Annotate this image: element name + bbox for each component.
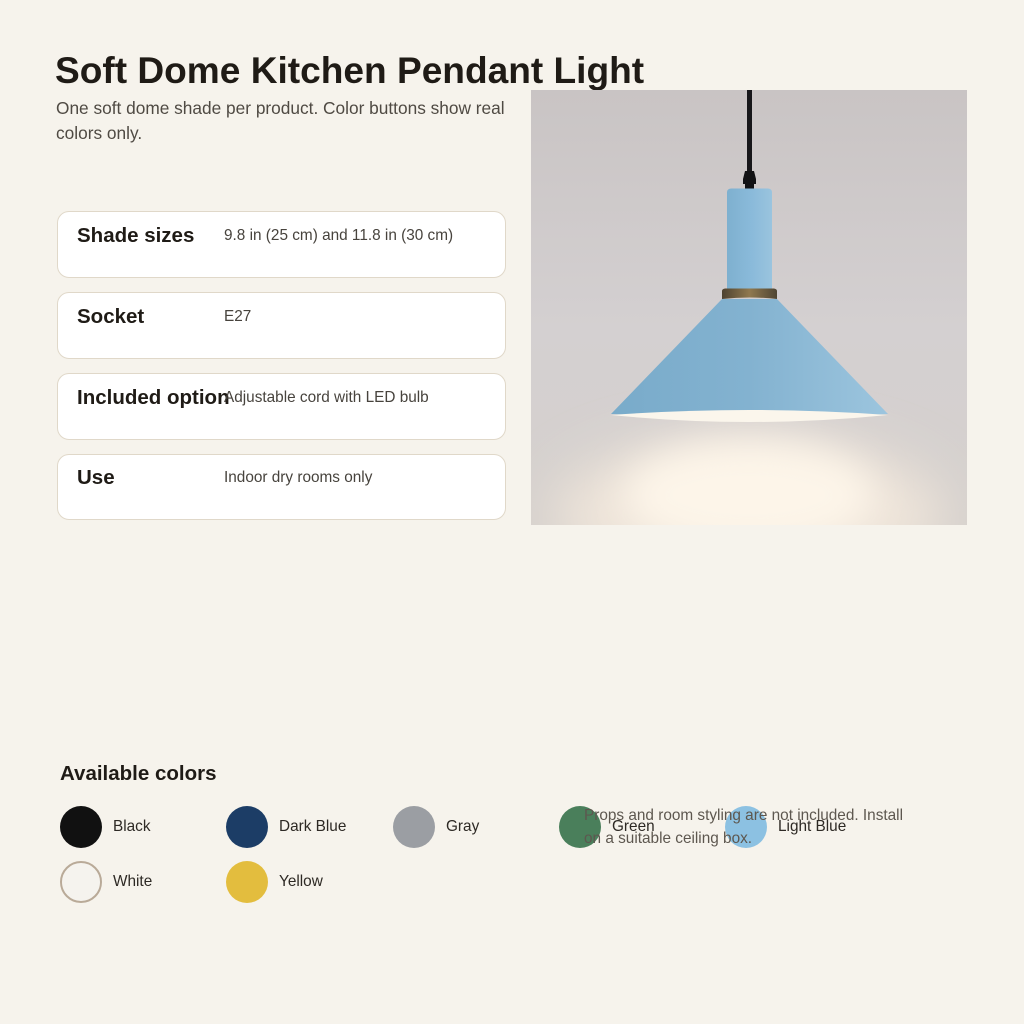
colors heading: Available colors [60,762,216,785]
spec card: shade sizes [56,211,506,278]
spec card: use: Indoor dry rooms only [224,469,372,486]
spec card: socket [56,292,506,359]
swatch: white: White [113,872,152,890]
shade inner rim [611,410,888,422]
swatch: dark blue [226,806,346,848]
spec card: shade sizes: 9.8 in (25 cm) and 11.8 in (30 cm) [224,227,453,244]
footnote: Props and room styling are not included. Install on a suitable ceiling box. [584,807,903,847]
spec card: shade sizes: Shade sizes [77,224,194,247]
product photo: blue pendant lamp [531,90,967,525]
swatch: green [559,806,655,848]
swatch: gray: Gray [446,818,479,834]
spec card: socket: E27 [224,308,251,325]
swatch: black [60,806,151,848]
brass collar [722,288,777,299]
cone shade [611,299,888,420]
swatch: light blue [725,806,846,848]
spec card: use: Use [77,466,115,489]
cylinder neck [727,188,772,290]
light glow [554,440,944,590]
cord [747,90,752,174]
spec card: included option: Adjustable cord with LED bulb [224,389,429,406]
spec card: socket: Socket [77,305,144,328]
spec card: included option: Included option [77,386,230,409]
swatch: gray [393,806,480,848]
title: Soft Dome Kitchen Pendant Light [55,49,644,91]
swatch: green: Green [612,818,655,834]
swatch: light blue: Light Blue [778,818,846,834]
spec card: use [56,454,506,520]
spec card: included option [56,373,506,440]
swatch: black: Black [113,818,151,834]
swatch: white [60,861,152,903]
subtitle: One soft dome shade per product. Color buttons show real colors only. [56,98,505,143]
swatch: dark blue: Dark Blue [279,818,346,834]
swatch: yellow [226,861,323,903]
socket [743,171,756,189]
swatch: yellow: Yellow [279,872,323,890]
wall background [531,90,967,525]
